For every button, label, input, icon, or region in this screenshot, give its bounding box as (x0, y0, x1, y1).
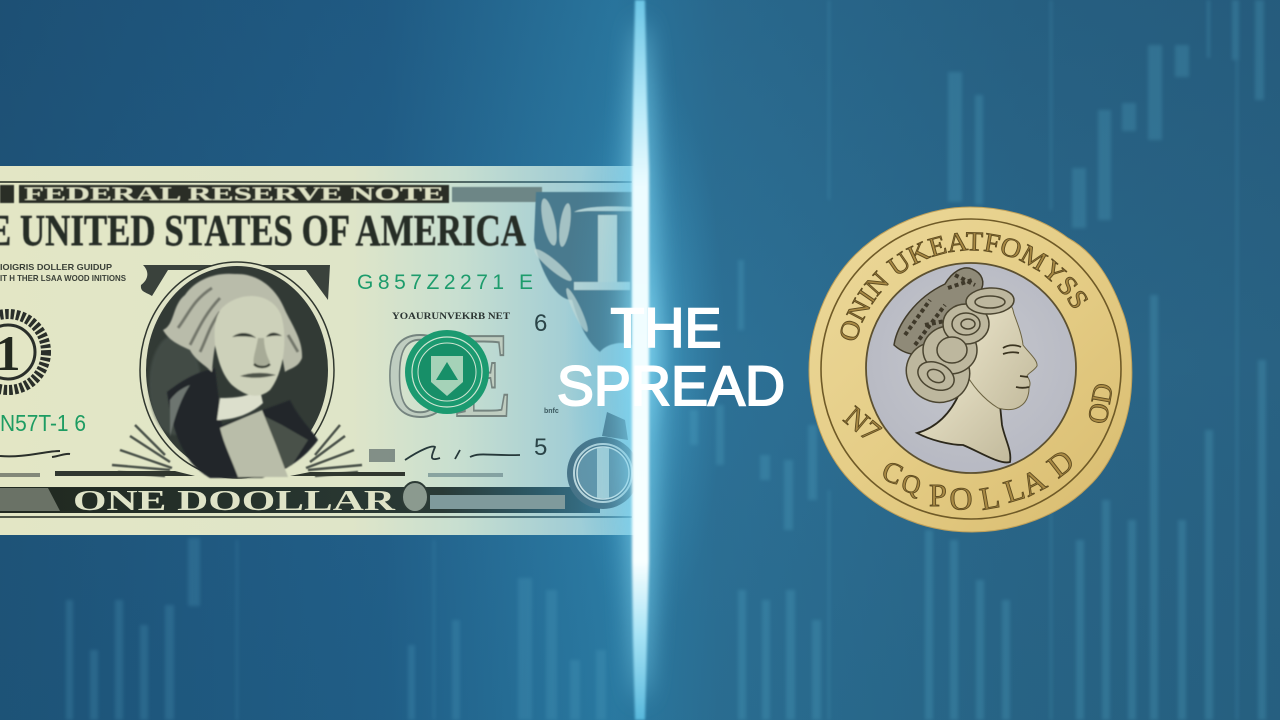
header band: federal reserve note: FEDERAL RESERVE NOTE (24, 184, 444, 205)
coin lettering: D (1040, 442, 1081, 485)
background candlestick chart: right side (690, 0, 1266, 720)
bottom band: one dollar (0, 471, 600, 517)
pound coin (808, 206, 1132, 532)
bill paper (0, 166, 634, 535)
engraved border frame (0, 182, 632, 517)
numerals 6 and 5 (534, 310, 547, 461)
small text right: bnfc (544, 408, 559, 415)
upper right leaf ornament and numeral 1 (531, 192, 632, 352)
silver centre (866, 263, 1076, 473)
coin lettering: L (977, 478, 1002, 517)
coin rim (809, 207, 1132, 532)
coin lettering: L (1000, 470, 1029, 510)
coin lettering: N7 (838, 400, 887, 449)
small print upper left (0, 262, 126, 283)
glowing light beam (565, 0, 725, 720)
face (961, 292, 1037, 410)
heading: the united states of america: E UNITED STATES OF AMERICA (0, 206, 526, 255)
frame scrolls (141, 265, 330, 300)
bottom band: one dollar: ONE DOOLLAR (73, 485, 397, 517)
coin lettering: O (948, 480, 973, 517)
facial features (1003, 345, 1029, 388)
small caption over seal: YOAURUNVEKRB NET (392, 312, 511, 322)
hair (163, 274, 302, 372)
title: the spread (557, 297, 785, 417)
bust (163, 274, 318, 478)
coin lettering (838, 232, 1120, 517)
signatures (369, 447, 520, 477)
title: the spread: THE (610, 297, 722, 359)
small print upper left: IT H THER LSAA WOOD INITIONS (0, 273, 126, 283)
portrait frame (112, 262, 362, 478)
coin lettering: P (929, 477, 947, 513)
numerals 6 and 5: 5 (534, 434, 547, 461)
coin lettering: A (1015, 461, 1052, 503)
title: the spread: SPREAD (557, 355, 785, 417)
lower right ornament with 1 (567, 412, 639, 509)
coin lettering: ONIN UKEATFOMYSS (840, 232, 1088, 340)
coin lettering: Q (898, 468, 924, 501)
neck and bust (917, 370, 1010, 462)
dollar bill (0, 166, 639, 535)
green serial right: G857Z2271 E (357, 271, 533, 294)
signature left (0, 451, 70, 457)
left seal (0, 314, 46, 390)
header band: federal reserve note (0, 184, 542, 205)
hair curls (896, 287, 1015, 413)
oval (140, 262, 334, 478)
coin inner ring line (821, 219, 1121, 519)
face (215, 296, 284, 396)
small print left bottom (0, 473, 40, 477)
leaf sprays (112, 425, 362, 476)
background candlestick chart: left bottom (66, 538, 606, 720)
coin lettering: OD (1082, 381, 1120, 426)
numerals 6 and 5: 6 (534, 310, 547, 337)
coin lettering: C (877, 455, 907, 492)
large grey one lettering: OE (386, 308, 512, 443)
green treasury seal (405, 330, 489, 414)
green serial left: N57T-1 6 (0, 410, 86, 436)
small print upper left: IOIGRIS DOLLER GUIDUP (0, 262, 112, 272)
queen profile (894, 268, 1037, 462)
crown (894, 268, 983, 355)
